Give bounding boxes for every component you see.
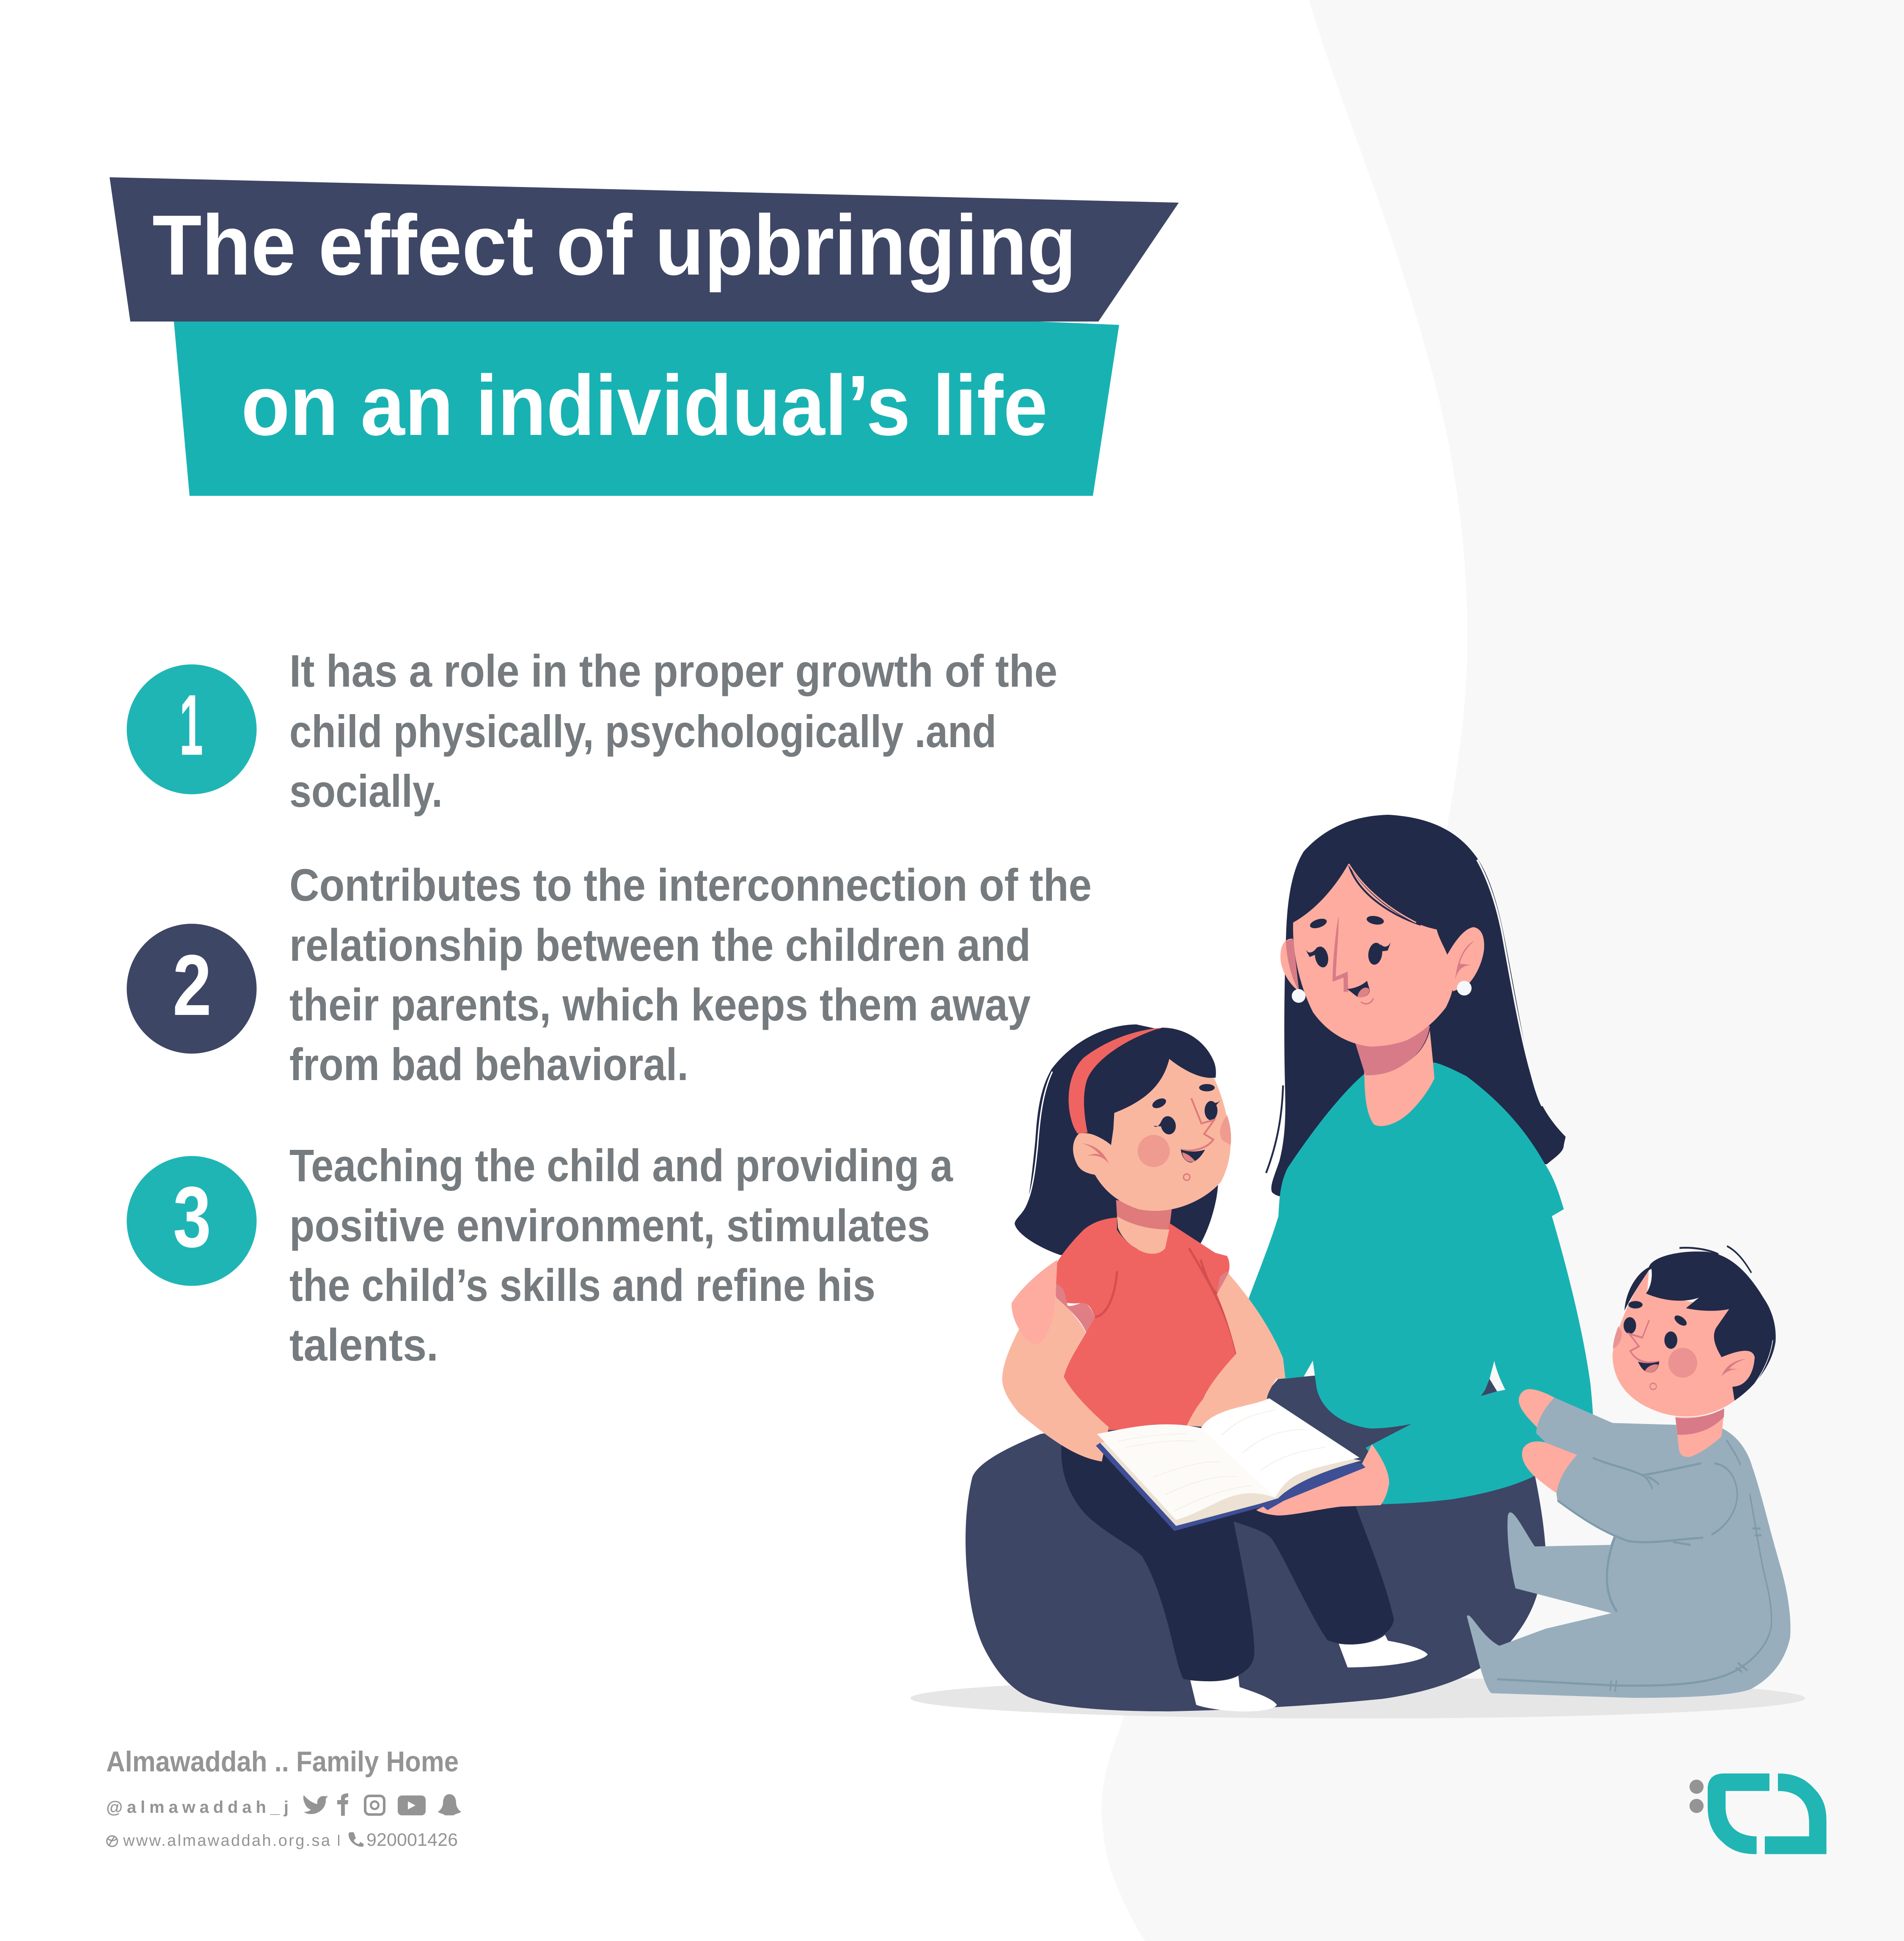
title banner teal ribbon [174,322,1119,496]
mother's earrings [1292,989,1306,1003]
sleeve shadow [1054,1284,1095,1332]
mother's hair [1271,815,1566,1197]
item 3 text: positive environment, stimulates [289,1200,930,1251]
waist gap [1489,1361,1505,1391]
mother's mouth [1347,981,1370,997]
girl's fringe [1084,1028,1216,1145]
girl's chin swirl [1183,1174,1190,1180]
website: www.almawaddah.org.sa [123,1832,330,1850]
baby's chin swirl [1650,1383,1656,1389]
book page edges [1100,1428,1361,1526]
number badge 2 [127,924,256,1053]
mother's teal sweater [1249,1062,1593,1504]
baby's neck [1675,1410,1724,1457]
number badge 3 [127,1156,256,1286]
item 2 text [289,859,1092,1090]
item 2 text: Contributes to the interconnection of the [289,859,1092,910]
baby's mouth [1638,1361,1659,1373]
baby's suit folds [1497,1441,1772,1692]
baby's hair [1624,1251,1776,1401]
baby's face and ear [1612,1270,1754,1416]
girl's face and ear [1073,1059,1230,1211]
baby's hair wisps [1679,1246,1751,1273]
book cover [1096,1443,1365,1531]
logo dots [1689,1780,1703,1813]
girl's right arm [1187,1273,1285,1427]
mother's eyes [1313,945,1330,969]
girl's hair strands [1018,1072,1052,1216]
girl's brows [1151,1097,1168,1110]
mother's nose [1333,916,1348,992]
girl's headband [1069,1028,1161,1133]
girl's ear detail [1082,1143,1109,1164]
baby figure [1467,1246,1791,1698]
item 3 text: talents. [289,1319,438,1370]
logo left bracket [1708,1773,1769,1854]
logo [1689,1773,1827,1854]
footer contact block [106,1746,461,1850]
book left page [1097,1424,1275,1520]
title banner dark ribbon [110,177,1179,322]
social handle: @almawaddah_j [106,1798,289,1817]
open book [1096,1398,1365,1531]
item 1 text: socially. [289,765,443,817]
icon: phone [349,1832,364,1847]
item 2 text: relationship between the children and [289,919,1031,971]
girl's white socks [1190,1635,1428,1711]
mother figure [1249,815,1593,1504]
item 1 text [289,645,1057,817]
mother's hand on girl's shoulder [1012,1260,1057,1344]
beanbag seat and mother's lap [966,1375,1546,1711]
mother's brows [1309,917,1328,930]
background wave shape [1101,0,1904,1941]
baby's nose [1629,1320,1659,1362]
baby's ear detail [1722,1359,1746,1376]
baby's hands [1519,1389,1554,1428]
girl's neck [1117,1216,1169,1254]
item 2 text: their parents, which keeps them away [289,979,1031,1030]
girl's t-shirt folds [1095,1248,1236,1354]
list item 3 [127,1140,953,1370]
list item 1 [127,645,1057,817]
mother's hair strands [1266,860,1542,1173]
item 3 text: Teaching the child and providing a [289,1140,953,1191]
number 2: 2 [173,937,212,1034]
number 3: 3 [173,1169,211,1265]
baby's suit [1467,1397,1791,1698]
girl figure [1002,1024,1285,1462]
icon: facebook [337,1793,348,1816]
girl's eyes [1159,1115,1178,1136]
girl's trousers [1061,1444,1394,1682]
item 1 text: It has a role in the proper growth of the [289,645,1057,696]
icon: snapchat [438,1794,461,1815]
book right page [1201,1398,1359,1498]
mother's neck shadow [1354,1026,1430,1076]
mother's neck [1364,1030,1434,1126]
baby's eyes [1623,1317,1636,1334]
icon: youtube [398,1795,426,1815]
mother's face [1293,864,1453,1047]
girl's left arm [1002,1295,1109,1462]
title banner [110,177,1179,496]
girl's hair back [1015,1024,1219,1255]
mother's hand holding book [1256,1444,1389,1515]
title line 2: on an individual’s life [241,357,1048,453]
phone number: 920001426 [366,1830,458,1850]
icon: twitter [303,1795,328,1814]
item 3 text: the child’s skills and refine his [289,1259,875,1311]
book text lines [1118,1410,1326,1511]
list item 1: 1 [179,677,203,773]
baby's brows [1628,1301,1643,1309]
girl's nose [1181,1098,1214,1150]
separator [338,1835,339,1846]
icon: instagram [365,1796,384,1815]
mother's hair parting line [1349,865,1421,925]
girl's red t-shirt [1054,1218,1236,1430]
baby's cheeks [1668,1348,1697,1377]
item 2 text: from bad behavioral. [289,1039,688,1090]
number badge 1 [127,664,256,795]
title line 1: The effect of upbringing [152,197,1076,293]
girl's mouth [1181,1149,1205,1163]
item 3 text [289,1140,953,1370]
item 1 text: child physically, psychologically .and [289,706,996,757]
girl's neck shadow [1116,1200,1172,1229]
list item 2 [127,859,1092,1090]
illustration: mother reading with children [911,815,1805,1718]
girl's cheeks [1138,1135,1170,1167]
icon: globe [107,1836,118,1846]
logo right bracket [1765,1773,1827,1854]
ground shadow [911,1678,1805,1718]
footer heading: Almawaddah .. Family Home [106,1746,459,1778]
mother's ears [1280,939,1299,991]
